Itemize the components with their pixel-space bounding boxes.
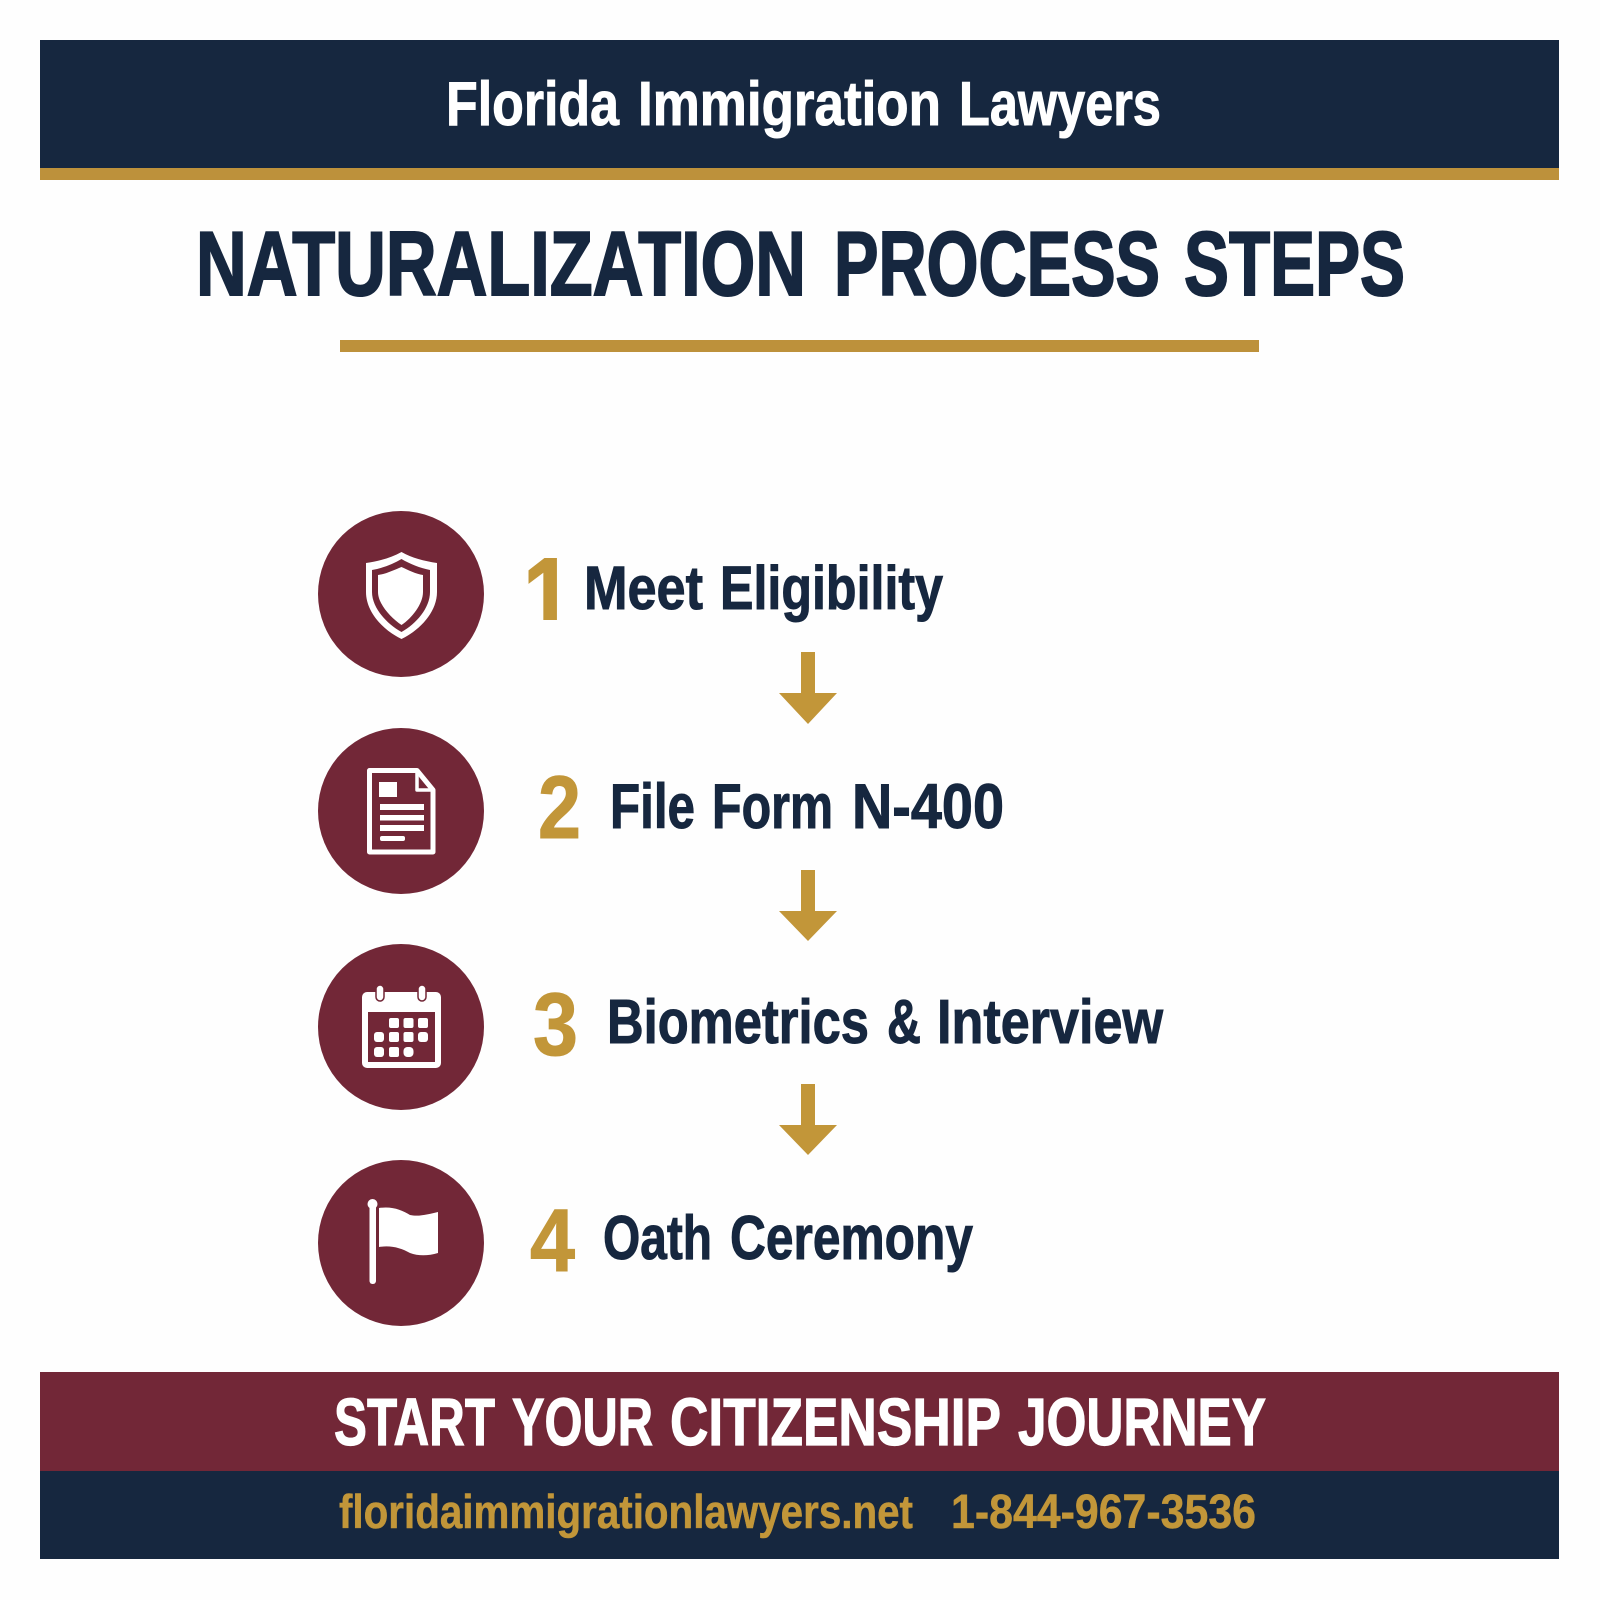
firm name xyxy=(446,70,1161,139)
step 1: meet eligibility xyxy=(318,511,943,677)
header banner xyxy=(40,40,1559,180)
step label: N-400 xyxy=(852,772,1004,842)
step label xyxy=(610,772,1004,842)
step number 4: 4 xyxy=(530,1190,575,1290)
footer call to action xyxy=(40,1372,1559,1471)
website: floridaimmigrationlawyers.net xyxy=(339,1485,913,1538)
firm name: Immigration xyxy=(638,70,941,139)
step label xyxy=(607,988,1164,1057)
step label: Interview xyxy=(937,988,1164,1057)
call to action text: CITIZENSHIP xyxy=(670,1385,1001,1460)
step label: Eligibility xyxy=(720,554,943,622)
icon: calendar xyxy=(362,985,441,1068)
step 3: biometrics and interview xyxy=(318,944,1164,1110)
title: PROCESS xyxy=(834,214,1160,315)
icon: flag xyxy=(368,1199,438,1284)
call to action text: JOURNEY xyxy=(1018,1385,1266,1460)
step label: Meet xyxy=(584,554,703,622)
step label: & xyxy=(887,988,921,1057)
call to action text xyxy=(334,1385,1266,1460)
step label xyxy=(603,1204,973,1273)
call to action text: YOUR xyxy=(512,1385,653,1460)
phone number: 1-844-967-3536 xyxy=(951,1486,1256,1539)
step label: Oath xyxy=(603,1204,712,1273)
step 4: oath ceremony xyxy=(318,1160,973,1326)
icon: shield xyxy=(366,552,437,639)
step 2: file form xyxy=(318,728,1004,894)
step number 1: 1 xyxy=(523,535,573,656)
step label xyxy=(584,554,943,622)
call to action text: START xyxy=(334,1385,495,1460)
arrow 1 xyxy=(779,652,837,724)
title: STEPS xyxy=(1184,214,1405,315)
arrow 2 xyxy=(779,870,837,941)
icon: document xyxy=(370,770,433,852)
step label: Form xyxy=(712,772,833,842)
arrow 3 xyxy=(779,1084,837,1155)
firm name: Lawyers xyxy=(959,70,1161,139)
step number 2: 2 xyxy=(538,757,581,857)
step label: Biometrics xyxy=(607,988,869,1057)
footer contact bar xyxy=(40,1471,1559,1559)
step number 3: 3 xyxy=(533,974,578,1074)
title: NATURALIZATION xyxy=(196,214,806,315)
title xyxy=(196,214,1405,352)
firm name: Florida xyxy=(446,70,619,139)
step label: File xyxy=(610,772,695,842)
step label: Ceremony xyxy=(730,1204,973,1273)
